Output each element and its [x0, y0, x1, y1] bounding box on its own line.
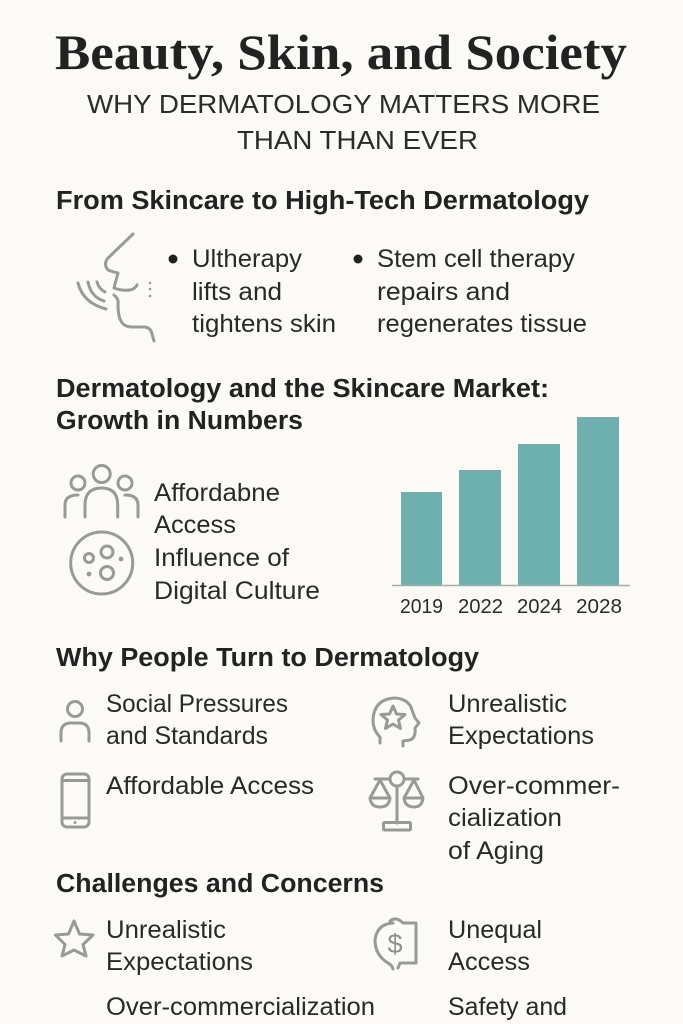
text: over-commercialization of aging — [448, 772, 620, 865]
icon: scales — [370, 772, 423, 830]
title: Beauty, Skin, and Society — [55, 24, 627, 80]
bullet list: ultherapy: lifts and — [192, 278, 282, 306]
bullet list: ultherapy: tightens skin — [192, 310, 336, 338]
icon: group of people — [65, 466, 138, 517]
text: over-commercialization of aging: Over-commer- — [448, 772, 620, 800]
heading: market growth: Growth in Numbers — [56, 407, 303, 435]
text: social pressures — [106, 690, 288, 750]
heading: high-tech: From Skincare to High-Tech Dermatology — [56, 187, 590, 215]
text: unrealistic expectations: Expectations — [448, 722, 594, 750]
text: unequal access: Access — [448, 948, 530, 976]
icon: skin cells — [71, 532, 133, 594]
text: market factors: Digital Culture — [154, 577, 320, 605]
bullet list: ultherapy — [168, 245, 336, 338]
icon: face profile — [78, 234, 154, 341]
text: over-commercialization of aging: cialization — [448, 804, 562, 832]
text: affordable access: Affordable Access — [106, 772, 314, 800]
bullet list: stem cell — [354, 245, 587, 338]
bar chart: 2022 — [458, 596, 503, 618]
panel: why people turn to dermatology — [56, 644, 620, 865]
heading: why people: Why People Turn to Dermatology — [56, 644, 480, 672]
text: unequal access: Unequal — [448, 916, 542, 944]
heading: market growth: Dermatology and the Skincare Market: — [56, 375, 549, 403]
text: market factors: Access — [154, 511, 236, 539]
subtitle: WHY DERMATOLOGY MATTERS MORE — [87, 91, 600, 119]
text: unrealistic expectations: Expectations — [106, 948, 253, 976]
text: market factors — [154, 479, 320, 605]
text: social pressures: and Standards — [106, 722, 268, 750]
icon: price tag with dollar — [375, 919, 416, 969]
heading: market growth — [56, 375, 549, 435]
icon: smartphone — [62, 774, 89, 827]
heading: challenges: Challenges and Concerns — [56, 870, 384, 898]
bar chart — [392, 417, 630, 618]
text: over-commercialization of aging: of Aging — [448, 837, 544, 865]
text: market factors: Affordabne — [154, 479, 280, 507]
text: over-commercialization: Over-commercialization — [106, 993, 375, 1021]
text: social pressures: Social Pressures — [106, 690, 288, 718]
subtitle: THAN THAN EVER — [237, 127, 478, 155]
subtitle — [87, 91, 600, 155]
bar chart: 2028 — [576, 596, 622, 618]
icon: price tag with dollar: $ — [387, 929, 403, 959]
text: unrealistic expectations — [106, 916, 253, 976]
icon: star outline — [56, 921, 93, 956]
bar chart: 2019 — [400, 596, 443, 618]
bullet list: stem cell: regenerates tissue — [377, 310, 587, 338]
panel: challenges and concerns — [56, 870, 567, 1021]
icon: head with star — [373, 698, 419, 746]
bar chart: 2024 — [517, 596, 562, 618]
text: unrealistic expectations: Unrealistic — [106, 916, 226, 944]
text: unequal access — [448, 916, 542, 976]
icon: person — [61, 702, 89, 741]
bullet list: stem cell: Stem cell therapy — [377, 245, 576, 273]
bullet list: ultherapy: Ultherapy — [192, 245, 303, 273]
panel: from skincare to high-tech dermatology — [56, 187, 590, 341]
text: unrealistic expectations: Unrealistic — [448, 690, 567, 718]
text: market factors: Influence of — [154, 544, 289, 572]
text: safety and: Safety and — [448, 993, 567, 1021]
bullet list: stem cell: repairs and — [377, 278, 510, 306]
panel: skincare market growth — [56, 375, 630, 618]
text: unrealistic expectations — [448, 690, 594, 750]
